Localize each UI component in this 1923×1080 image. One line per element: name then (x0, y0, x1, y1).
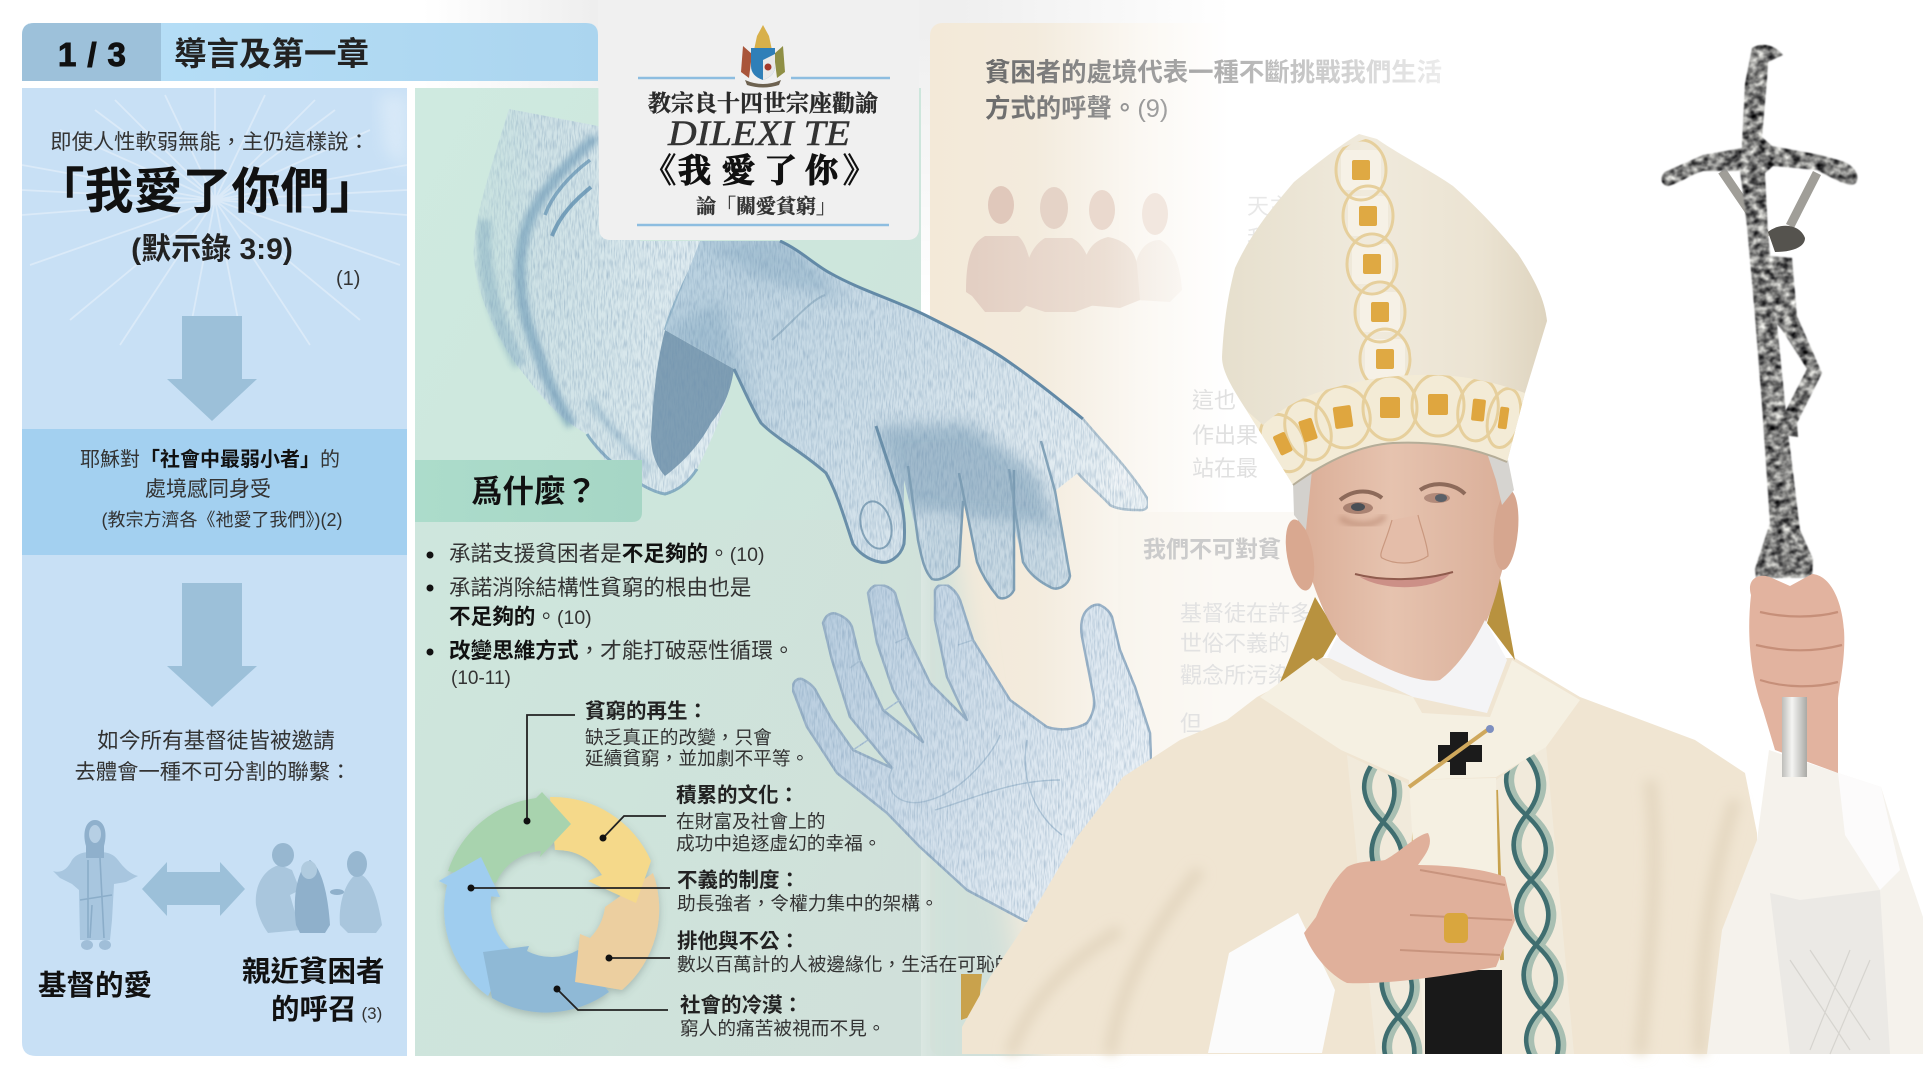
robe folds (1010, 780, 1735, 1054)
chapter number: 1/3 (58, 36, 137, 73)
panel: introduction column (22, 88, 407, 1056)
hand outline (734, 241, 1148, 598)
title lines: 論「關愛貧窮」 (696, 194, 836, 218)
callout: unjust system: 不義的制度： (677, 869, 800, 892)
segment: green (448, 792, 571, 883)
label: call to closeness with the poor: 親近貧困者 (242, 956, 385, 988)
callout: reproduction of poverty: 貧窮的再生： (585, 700, 708, 723)
segment: yellow (550, 797, 651, 903)
head and neck (1281, 440, 1521, 686)
text: Jesus empathy: 處境感同身受 (145, 478, 271, 501)
faded text block: lower: 世俗不義的 (1180, 631, 1290, 656)
nose (1381, 515, 1428, 563)
callout: exclusion and injustice (677, 930, 1088, 975)
tab: why (415, 460, 642, 522)
heading: why: 爲什麼？ (471, 473, 597, 509)
footnote 1: (1) (336, 268, 360, 290)
ring (1444, 913, 1468, 943)
card: document title (598, 0, 919, 240)
arrow: two-way (142, 862, 245, 916)
title lines: 《我愛了你》 (643, 153, 876, 190)
segment: tan (575, 873, 659, 990)
crozier: silver shaft (1782, 697, 1807, 1054)
panel: why (green) (415, 88, 1040, 1080)
callout: reproduction of poverty (585, 700, 809, 769)
faded text block: upper: 這也 (1192, 388, 1236, 413)
bullet 3: 改變思維方式，才能打破惡性循環。 (449, 638, 795, 663)
callout: culture of accumulation: 成功中追逐虛幻的幸福。 (676, 833, 882, 854)
smile (1360, 574, 1450, 587)
chapter number box (22, 23, 161, 81)
illustration: reaching hand from above (473, 109, 1148, 600)
label: call to closeness with the poor (242, 956, 385, 1026)
orphrey panels with braids (1347, 745, 1574, 1080)
heading: cry of the poor: 貧困者的處境代表一種不斷挑戰我們生活 (985, 58, 1442, 87)
arrow: down 2 (167, 583, 257, 707)
faded text block: lower (1143, 536, 1312, 736)
text: Jesus empathy: 耶穌對「社會中最弱小者」的 (80, 447, 340, 471)
white cuff (1208, 913, 1335, 1053)
callout: reproduction of poverty: 延續貧窮，並加劇不平等。 (585, 748, 809, 769)
chart: vicious circle (439, 715, 670, 1013)
callout: exclusion and injustice: 排他與不公： (677, 930, 800, 953)
hand on chest with ring (1304, 833, 1515, 983)
central stole strip (1409, 778, 1502, 1054)
text: citation Revelation: (默示錄 3:9) (131, 233, 293, 266)
faded text block: lower: 觀念所污染 (1180, 663, 1290, 688)
callout: social indifference: 社會的冷漠： (680, 993, 803, 1017)
heading: I have loved you: 「我愛了你們」 (35, 165, 379, 219)
illustration: four poor people (966, 186, 1182, 312)
bullet 3: (10-11) (451, 668, 511, 689)
faded text block: upper: 作出果 (1192, 423, 1258, 448)
text: Jesus empathy: (教宗方濟各《祂愛了我們》)(2) (102, 510, 342, 530)
segment: light blue arrowhead (439, 857, 500, 897)
segment: dark blue (483, 946, 609, 1013)
callout: unjust system (677, 869, 939, 914)
illustration: Pope Leo XIV (961, 45, 1923, 1080)
chapter title: 導言及第一章 (174, 36, 369, 72)
faded text block: upper: 站在最 (1192, 456, 1258, 481)
faded text block: lower: 基督徒在許多 (1180, 601, 1312, 626)
hand body (665, 241, 1148, 598)
icon: people sharing (256, 843, 382, 933)
hair (1293, 470, 1312, 530)
mitre lower band (1248, 374, 1525, 484)
mitre vertical band (1336, 140, 1410, 389)
palm creases (850, 637, 1062, 835)
callout: exclusion and injustice: 數以百萬計的人被邊緣化，生活在可恥的貧困中。 (677, 954, 1088, 975)
bullet 3 (426, 638, 795, 689)
callout: social indifference: 窮人的痛苦被視而不見。 (680, 1018, 886, 1039)
white collar (1327, 620, 1507, 713)
icon: Christ figure (53, 820, 138, 950)
callout: culture of accumulation (676, 783, 882, 854)
eyes and brows (1340, 484, 1465, 525)
label: call to closeness with the poor: 的呼召 (3) (271, 994, 382, 1026)
text: inseparable bond: 去體會一種不可分割的聯繫： (75, 760, 351, 784)
sleeve shadow strokes (484, 137, 704, 494)
black pallium pendant (1425, 970, 1502, 1054)
faded text block: lower: 但 (1180, 711, 1202, 736)
sleeve interior shadow (651, 330, 734, 476)
alb and right sleeve (1707, 750, 1923, 1054)
callout: social indifference (680, 993, 886, 1039)
divider lines (637, 78, 890, 225)
heading: cry of the poor: 方式的呼聲。(9) (985, 94, 1168, 123)
title lines: 教宗良十四世宗座勸諭 (648, 91, 878, 116)
mid-blue band (22, 429, 407, 555)
heading: cry of the poor (985, 58, 1442, 123)
shaft in front of hand (1782, 697, 1807, 777)
faded text block: lower: 我們不可對貧 (1143, 536, 1281, 562)
cream yoke (1260, 658, 1580, 780)
sleeve (473, 109, 734, 494)
bullet 2 (426, 575, 751, 629)
gold pin (1409, 728, 1490, 787)
faded text block: upper (1192, 194, 1291, 481)
illustration: open hand from below (792, 585, 1152, 922)
label: love of Christ: 基督的愛 (38, 970, 152, 1002)
bullet 2: 承諾消除結構性貧窮的根由也是 (449, 575, 751, 600)
list: reasons (426, 541, 795, 689)
hand shading (665, 241, 1147, 600)
panel: poverty call (beige, fading) (930, 23, 1442, 1056)
gold backing piece (961, 974, 982, 1020)
text: inseparable bond: 如今所有基督徒皆被邀請 (97, 728, 335, 753)
faded text block: upper: 我 (1247, 226, 1269, 251)
title lines: DILEXI TE (667, 113, 850, 153)
text: intro: 即使人性軟弱無能，主仍這樣說： (50, 130, 370, 154)
sunburst rays (22, 88, 407, 345)
holding hand (1749, 574, 1844, 773)
leader lines (471, 715, 670, 1010)
gold back collar (1280, 578, 1515, 682)
text: inseparable bond (75, 728, 351, 784)
header bar (22, 23, 598, 81)
pallium cross (1438, 732, 1482, 775)
robe body (962, 658, 1757, 1054)
callout: culture of accumulation: 在財富及社會上的 (676, 811, 826, 832)
callout: culture of accumulation: 積累的文化： (676, 783, 799, 807)
segment: light blue (439, 857, 511, 996)
faded text block: upper: 天主 (1247, 194, 1291, 219)
arrow: down 1 (167, 316, 257, 421)
icon: papal coat of arms (741, 25, 785, 88)
text: Jesus empathy (80, 447, 342, 530)
bullet 2: 不足夠的。(10) (449, 604, 592, 629)
callout: reproduction of poverty: 缺乏真正的改變，只會 (585, 727, 772, 748)
bullet 1: 承諾支援貧困者是不足夠的。(10) (449, 541, 764, 566)
title lines (643, 91, 878, 218)
callout: unjust system: 助長強者，令權力集中的架構。 (677, 893, 939, 914)
mitre (1222, 134, 1547, 490)
crozier: upper crucifix (1662, 45, 1858, 578)
